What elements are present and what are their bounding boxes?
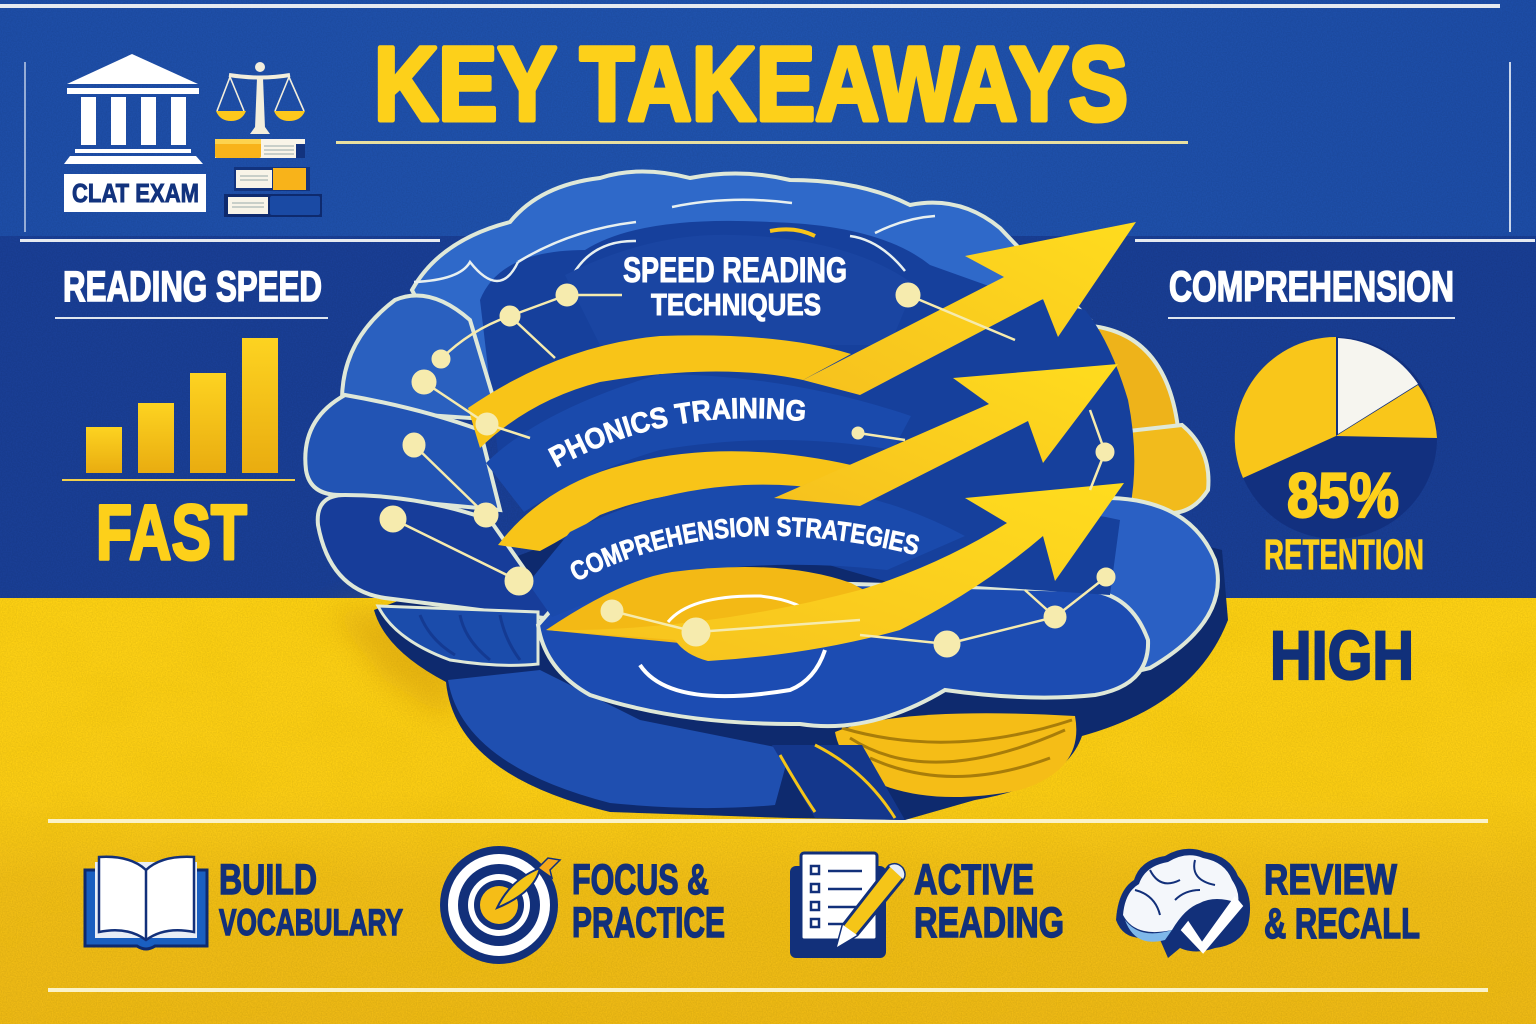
- swoosh 3: [546, 567, 905, 645]
- right yellow lobes: [1075, 325, 1208, 513]
- text: focus and practice: PRACTICE: [572, 899, 725, 947]
- arrow: bottom: [546, 483, 1124, 661]
- banner: comprehension strategies: [532, 484, 964, 614]
- panel: comprehension: [1168, 263, 1455, 694]
- highlight stroke: [640, 650, 825, 696]
- soft shadow on yellow: [330, 610, 460, 720]
- heading: reading speed: READING SPEED: [63, 263, 322, 311]
- icon: stack of books: [215, 139, 322, 217]
- inner dark region: [480, 221, 1134, 600]
- panel: bottom tips: [85, 846, 1420, 964]
- title: KEY TAKEAWAYS: [374, 26, 1128, 143]
- text: active reading: [914, 856, 1064, 947]
- icon: scales of justice: [216, 62, 305, 134]
- top cap lobe: [412, 172, 1090, 430]
- swoosh 2: [498, 451, 851, 551]
- right inner gyri: [960, 513, 1120, 595]
- lower lobe: [448, 670, 790, 808]
- banner: speed reading techniques: SPEED READING: [623, 251, 847, 290]
- text: active reading: READING: [914, 899, 1064, 947]
- panel: reading speed: [55, 263, 328, 576]
- gyri highlights: [414, 200, 935, 282]
- icon: target with arrow: [440, 846, 560, 964]
- swoosh 1: [468, 335, 851, 448]
- label: high: HIGH: [1270, 617, 1414, 694]
- banner: phonics training: PHONICS TRAINING: [548, 398, 806, 468]
- icon: courthouse with CLAT EXAM label: [64, 54, 206, 212]
- panel: comprehension: RETENTION: [1264, 531, 1424, 579]
- text: active reading: ACTIVE: [914, 856, 1034, 904]
- arrow: top: [803, 222, 1136, 395]
- text: focus and practice: [572, 856, 725, 947]
- icon: brain with check: [1116, 849, 1250, 958]
- text: review and recall: & RECALL: [1264, 900, 1420, 948]
- lower left lobe: [318, 495, 560, 620]
- text: build vocabulary: BUILD: [219, 856, 317, 904]
- icon: checklist with pencil: [790, 853, 904, 958]
- banner: speed reading techniques: TECHNIQUES: [651, 287, 821, 322]
- text: build vocabulary: [219, 856, 403, 943]
- cerebellum: [835, 713, 1076, 797]
- middle left lobe: [305, 395, 500, 510]
- banner: speed reading techniques: [565, 235, 915, 345]
- text: review and recall: [1264, 856, 1420, 948]
- neural network nodes: [380, 283, 1115, 657]
- text: review and recall: REVIEW: [1264, 856, 1397, 904]
- text: build vocabulary: VOCABULARY: [219, 902, 403, 943]
- lower left ridge: [378, 606, 538, 665]
- text: focus and practice: FOCUS &: [572, 856, 709, 904]
- label: fast: FAST: [96, 488, 247, 576]
- icon: open book: [85, 857, 207, 949]
- brain silhouette shadow: [374, 520, 1228, 820]
- upper left lobe: [342, 296, 500, 420]
- stat: 85% retention: 85%: [1287, 461, 1399, 531]
- pie chart: [1235, 337, 1437, 539]
- right blue lobe: [1000, 498, 1218, 680]
- arrow: middle: [774, 364, 1118, 506]
- bar chart: [86, 338, 278, 473]
- banner: comprehension strategies: COMPREHENSION STRATEGIES: [570, 516, 920, 580]
- brain stem: [772, 745, 905, 820]
- banner: phonics training: [486, 374, 911, 512]
- brain illustration: [303, 170, 1228, 820]
- icon: courthouse with CLAT EXAM label: CLAT EXAM: [72, 178, 199, 208]
- lower main lobe: [538, 580, 1148, 726]
